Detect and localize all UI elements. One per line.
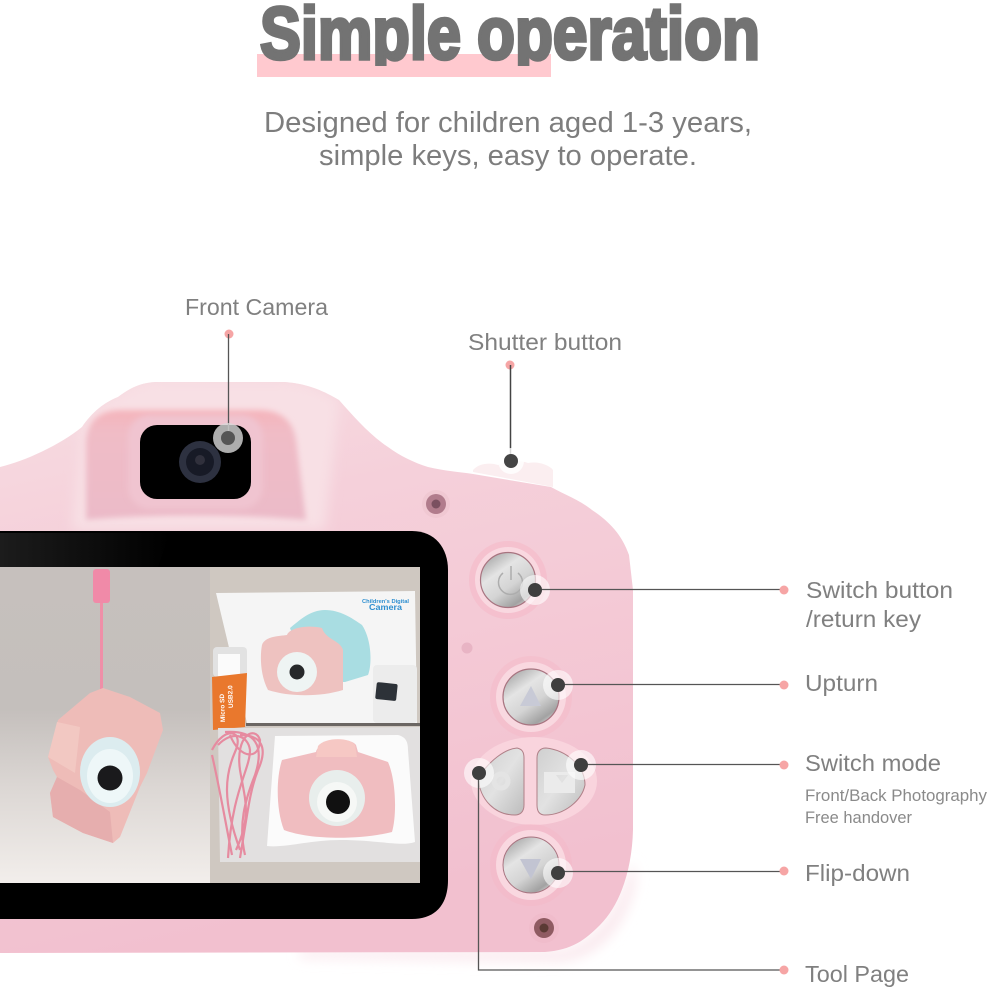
callout: Tool Page (464, 758, 909, 987)
power button (469, 541, 547, 619)
microphone hole (462, 642, 472, 654)
subtitle: simple keys, easy to operate. (319, 140, 697, 172)
lens (98, 766, 122, 790)
memory card (373, 665, 417, 723)
callout: Tool Page: Tool Page (805, 961, 909, 987)
title text (260, 3, 758, 66)
callout: Front Camera: Front Camera (185, 294, 329, 320)
callout: Upturn: Upturn (805, 670, 878, 696)
pink camera body (48, 688, 163, 843)
lens on box (277, 652, 317, 692)
box title: Children's Digital (362, 599, 409, 605)
up button (490, 656, 572, 738)
subtitle (264, 107, 752, 172)
strap (100, 600, 103, 690)
screen bezel (0, 531, 448, 919)
control buttons (469, 541, 597, 906)
callout: Flip-down: Flip-down (805, 860, 910, 886)
screen glare (0, 533, 170, 567)
top screw (422, 490, 450, 518)
front camera window (140, 425, 251, 499)
camera body (0, 382, 636, 962)
mode buttons (471, 737, 597, 825)
soft shadow (300, 860, 636, 962)
subtitle: Designed for children aged 1-3 years, (264, 107, 752, 139)
title highlight bar (257, 54, 551, 77)
dropdown icon (544, 772, 575, 793)
blue camera (290, 610, 370, 682)
eyepiece hood and recess (72, 382, 339, 530)
callout: Switch mode: Free handover (805, 809, 912, 827)
down button (490, 824, 572, 906)
front camera lens (179, 441, 221, 483)
screen (0, 531, 448, 919)
cable (212, 732, 263, 858)
lens ring (80, 737, 140, 807)
photo: package contents: Camera (369, 603, 403, 612)
callout: Switch mode (566, 750, 988, 827)
shutter button (473, 461, 553, 487)
title (257, 0, 760, 77)
gear icon (494, 774, 508, 788)
usb reader: USB2.0 (227, 685, 235, 708)
callout: Front Camera (185, 294, 329, 453)
usb reader (212, 647, 247, 730)
callout: Shutter button (468, 329, 622, 474)
pink camera on box (261, 627, 343, 695)
boxed camera lens (309, 770, 365, 826)
photo: package contents (210, 567, 420, 883)
boxed pink camera (278, 740, 395, 838)
callout: Switch mode: Switch mode (805, 750, 941, 776)
usb reader: Micro SD (219, 693, 227, 722)
callout: Upturn (543, 670, 878, 700)
callout: Switch button: /return key (806, 606, 921, 632)
bottom screw (529, 913, 559, 943)
callout: Switch mode: Front/Back Photography (805, 787, 988, 805)
callout: Switch button (520, 575, 953, 632)
photo: hanging camera (0, 567, 210, 883)
callout: Flip-down (543, 858, 910, 888)
box lid (216, 591, 417, 723)
callout: Shutter button: Shutter button (468, 329, 622, 355)
lower box (218, 727, 420, 862)
body shell (0, 382, 633, 953)
tray (267, 735, 415, 846)
callout: Switch button: Switch button (806, 577, 953, 603)
